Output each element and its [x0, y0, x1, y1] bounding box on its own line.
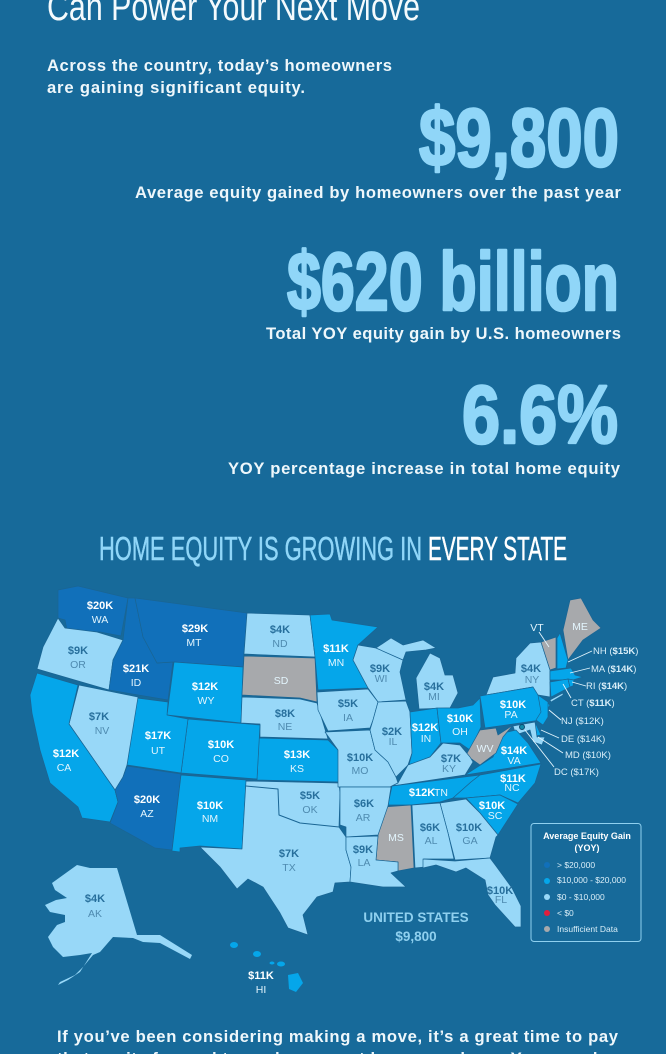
state labels: white: $12K [53, 748, 79, 760]
state labels: dark: FL [495, 894, 507, 906]
state labels: dark: $9K [68, 645, 88, 657]
state labels: dark: $5K [300, 790, 320, 802]
state labels: white: NM [202, 813, 218, 825]
state labels: white: $29K [182, 623, 208, 635]
legend: $0 - $10,000 [557, 892, 605, 902]
state labels: white: $10K [208, 739, 234, 751]
legend: (YOY) [574, 843, 600, 853]
state labels: white: CA [57, 762, 71, 774]
national figure [363, 910, 469, 944]
stat: percentage [228, 368, 621, 478]
callout leader lines [525, 632, 592, 767]
northeast callouts: CT ($11K) [571, 698, 615, 709]
state labels: dark: NY [525, 674, 539, 686]
legend: Average Equity Gain [543, 831, 631, 841]
Hawaii islands [230, 942, 303, 992]
northeast callouts: DE ($14K) [561, 734, 605, 745]
stat: total equity: Total YOY equity gain by U.S. homeowners [266, 324, 621, 343]
state labels: white: VT [530, 622, 544, 634]
state labels: dark: AL [425, 835, 438, 847]
state labels: white: OH [452, 726, 468, 738]
state labels: dark: $10K [487, 885, 513, 897]
state labels: dark: IL [389, 736, 398, 748]
national figure: $9,800 [395, 929, 437, 944]
state labels: dark [68, 624, 541, 920]
state labels: dark: AR [356, 812, 371, 824]
legend: $10,000 - $20,000 [557, 875, 626, 885]
state labels: dark: ND [272, 638, 288, 650]
stat: average equity [135, 91, 622, 202]
northeast callouts [554, 646, 638, 778]
state labels: dark: GA [462, 835, 478, 847]
state labels: white: AZ [140, 808, 154, 820]
stat: percentage: 6.6% [462, 368, 618, 461]
state labels: white: $21K [123, 663, 149, 675]
state labels: dark: $10K [456, 822, 482, 834]
state labels: dark: TX [282, 862, 296, 874]
state labels: dark: NV [95, 725, 109, 737]
state labels: white: CO [213, 753, 229, 765]
state labels: white: ID [131, 677, 142, 689]
northeast callouts: RI ($14K) [586, 681, 627, 692]
state labels: white: $17K [145, 730, 171, 742]
northeast callouts: MD ($10K) [565, 750, 611, 761]
state labels: dark: $4K [424, 681, 444, 693]
state labels: dark: IA [343, 712, 353, 724]
legend: > $20,000 [557, 860, 595, 870]
state labels: white: $11K [323, 643, 349, 655]
state labels: dark: $4K [85, 893, 105, 905]
state labels: white: $20K [134, 794, 160, 806]
state labels: white: $14K [501, 745, 527, 757]
state labels: dark: OK [302, 804, 318, 816]
state labels: white: UT [151, 745, 166, 757]
state labels: white: TN [434, 787, 448, 799]
state labels: dark: $2K [382, 726, 402, 738]
intro text [47, 56, 392, 97]
state labels: dark: $7K [441, 753, 461, 765]
state labels: white: $11K [248, 970, 274, 982]
state labels: white: $10K [447, 713, 473, 725]
state labels: dark: $10K [347, 752, 373, 764]
DC marker [520, 724, 524, 730]
state labels: white: IN [421, 733, 431, 745]
state labels: dark: WI [375, 673, 387, 685]
state labels: white: KS [290, 763, 304, 775]
state labels: dark: MO [352, 765, 368, 777]
state labels: white [53, 600, 588, 996]
state labels: dark: $4K [270, 624, 290, 636]
state labels: white: $20K [87, 600, 113, 612]
state labels: white: WA [92, 614, 108, 626]
state labels: dark: MI [428, 691, 440, 703]
state labels: white: $10K [500, 699, 526, 711]
state labels: dark: LA [358, 857, 370, 869]
state labels: dark: $4K [521, 663, 541, 675]
states [30, 586, 601, 985]
intro text: Across the country, today’s homeowners [47, 56, 392, 75]
state labels: dark: NE [278, 721, 292, 733]
stat: percentage: YOY percentage increase in total home equity [228, 459, 621, 478]
stat: average equity: Average equity gained by homeowners over the past year [135, 183, 622, 202]
stat: average equity: $9,800 [419, 91, 619, 184]
state labels: white: WY [198, 695, 214, 707]
state labels: dark: $7K [89, 711, 109, 723]
state labels: dark: $9K [370, 663, 390, 675]
national figure: UNITED STATES [363, 910, 469, 925]
state labels: white: MS [388, 832, 404, 844]
state labels: white: $12K [409, 787, 435, 799]
closing text: If you’ve been considering making a move, it’s a great time to pay [57, 1027, 619, 1046]
state labels: white: SD [274, 675, 289, 687]
state labels: white: PA [504, 709, 518, 721]
state labels: white: $12K [412, 722, 438, 734]
northeast callouts: MA ($14K) [591, 664, 636, 675]
state labels: dark: OR [70, 659, 86, 671]
legend: Insufficient Data [557, 924, 618, 934]
northeast callouts: NJ ($12K) [561, 716, 604, 727]
intro text: are gaining significant equity. [47, 78, 305, 97]
state labels: dark: AK [88, 908, 102, 920]
state labels: dark: $5K [338, 698, 358, 710]
state labels: white: $13K [284, 749, 310, 761]
state labels: dark: $6K [354, 798, 374, 810]
state labels: white: SC [488, 810, 503, 822]
state labels: white: $10K [197, 800, 223, 812]
state labels: white: $10K [479, 800, 505, 812]
legend [531, 824, 641, 942]
state labels: white: VA [507, 755, 521, 767]
state labels: white: NC [504, 782, 520, 794]
state labels: white: MN [328, 657, 344, 669]
state labels: white: $11K [500, 773, 526, 785]
map heading: HOME EQUITY IS GROWING IN [99, 531, 422, 568]
legend: < $0 [557, 908, 574, 918]
state labels: dark: $9K [353, 844, 373, 856]
state labels: dark: KY [442, 763, 456, 775]
state labels: white: $12K [192, 681, 218, 693]
state labels: white: HI [256, 984, 266, 996]
state labels: dark: $7K [279, 848, 299, 860]
state labels: white: WV [477, 743, 493, 755]
state labels: white: MT [186, 637, 202, 649]
state labels: dark: $8K [275, 708, 295, 720]
northeast callouts: DC ($17K) [554, 767, 599, 778]
state labels: white: ME [572, 621, 588, 633]
northeast callouts: NH ($15K) [593, 646, 638, 657]
US map [30, 586, 638, 996]
state labels: dark: $6K [420, 822, 440, 834]
map heading: EVERY STATE [428, 531, 567, 568]
